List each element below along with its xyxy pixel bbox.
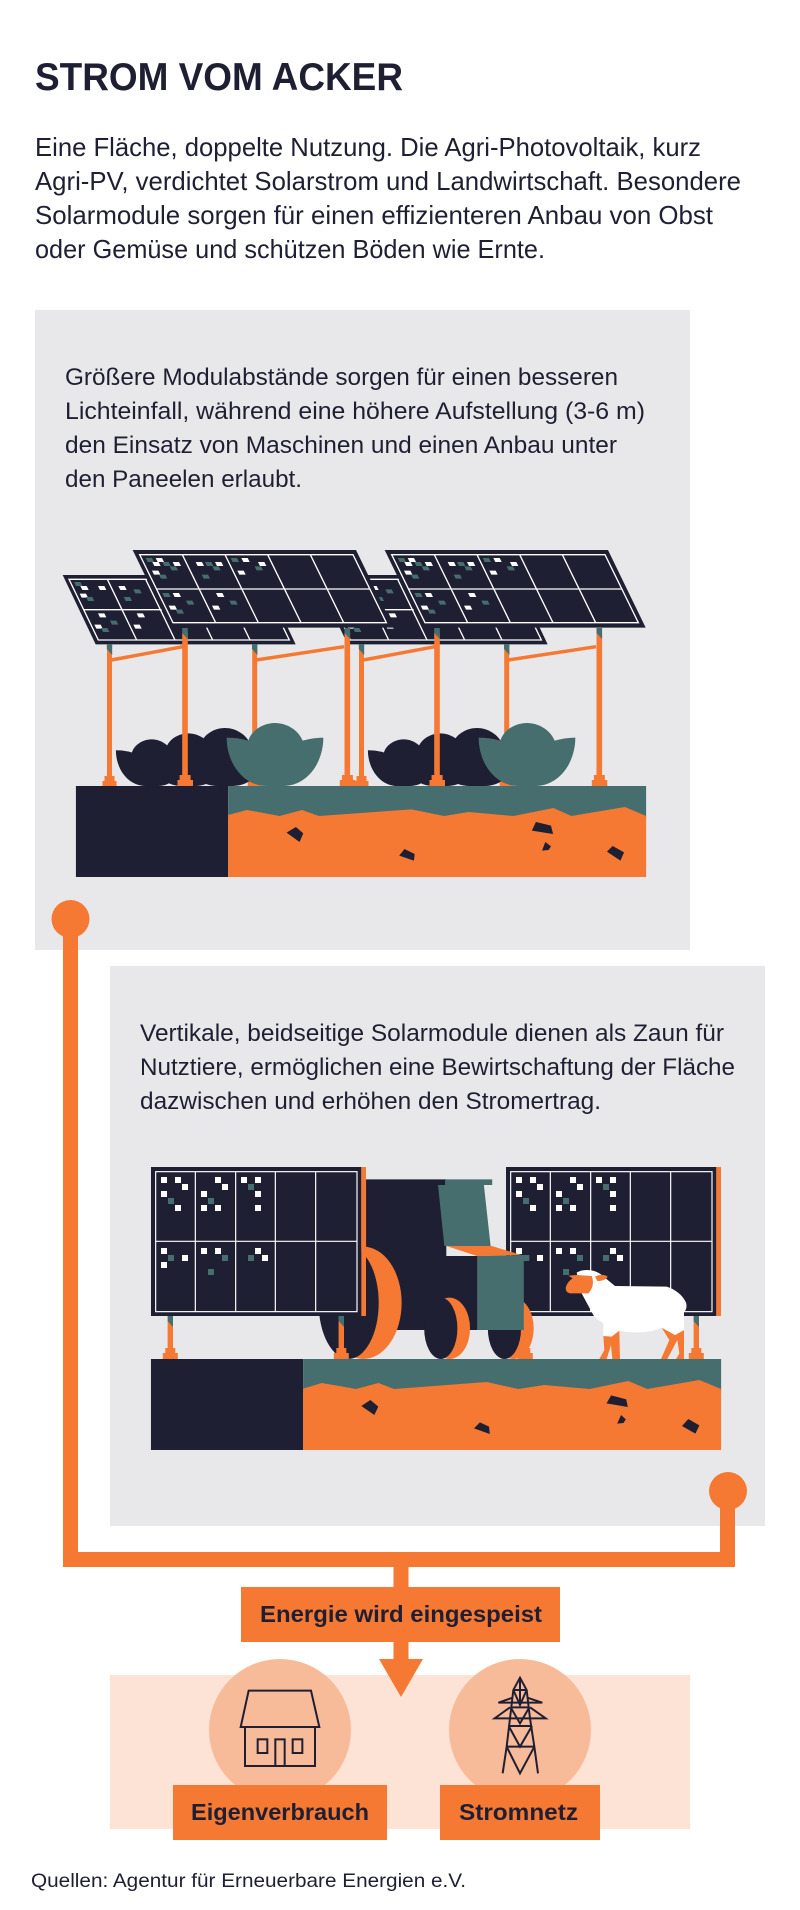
icon circle: power pylon (449, 1659, 591, 1801)
panel: consumers background (110, 1675, 690, 1829)
intro text: oder Gemüse und schützen Böden wie Ernte. (35, 234, 545, 264)
tractor (319, 1179, 534, 1359)
panel text: vertical modules: dazwischen und erhöhen den Stromertrag. (140, 1088, 601, 1115)
ground cross-section (76, 786, 646, 877)
label: Energie wird eingespeist (241, 1587, 560, 1642)
panel text: elevated modules: den Einsatz von Maschinen und einen Anbau unter (65, 432, 617, 459)
panel text: vertical modules: Nutztiere, ermöglichen eine Bewirtschaftung der Fläche (140, 1054, 735, 1081)
title: STROM VOM ACKER (35, 56, 403, 99)
intro text: Eine Fläche, doppelte Nutzung. Die Agri-Photovoltaik, kurz (35, 132, 701, 162)
sheep (566, 1270, 687, 1359)
panel text: elevated modules: Größere Modulabstände sorgen für einen besseren (65, 364, 618, 391)
intro text: Agri-PV, verdichtet Solarstrom und Landwirtschaft. Besondere (35, 166, 741, 196)
panel text: elevated modules: den Paneelen erlaubt. (65, 466, 302, 493)
label: Stromnetz (440, 1785, 600, 1840)
panel: vertical agri-PV (110, 966, 765, 1526)
panel text: elevated modules: Lichteinfall, während eine höhere Aufstellung (3-6 m) (65, 398, 645, 425)
intro text: Solarmodule sorgen für einen effizienteren Anbau von Obst (35, 200, 714, 230)
solar module right (506, 1167, 721, 1359)
panel text: elevated modules (65, 364, 645, 493)
ground cross-section (151, 1359, 721, 1450)
label: Eigenverbrauch (173, 1785, 387, 1840)
illustration: tilted solar modules on stilts with plants (63, 550, 646, 786)
icon circle: house (209, 1659, 351, 1801)
intro text (35, 132, 741, 264)
label: Stromnetz: Stromnetz (459, 1799, 578, 1825)
connector line from both panels (52, 900, 747, 1560)
panel text: vertical modules (140, 1020, 735, 1115)
label: Eigenverbrauch: Eigenverbrauch (191, 1799, 369, 1825)
solar module left (151, 1167, 366, 1359)
source line: Quellen: Agentur für Erneuerbare Energien e.V. (31, 1870, 466, 1892)
label: Energie wird eingespeist: Energie wird eingespeist (260, 1601, 542, 1627)
arrow: feed-in downwards (379, 1565, 423, 1697)
panel: elevated agri-PV (35, 310, 690, 950)
panel text: vertical modules: Vertikale, beidseitige Solarmodule dienen als Zaun für (140, 1020, 724, 1047)
